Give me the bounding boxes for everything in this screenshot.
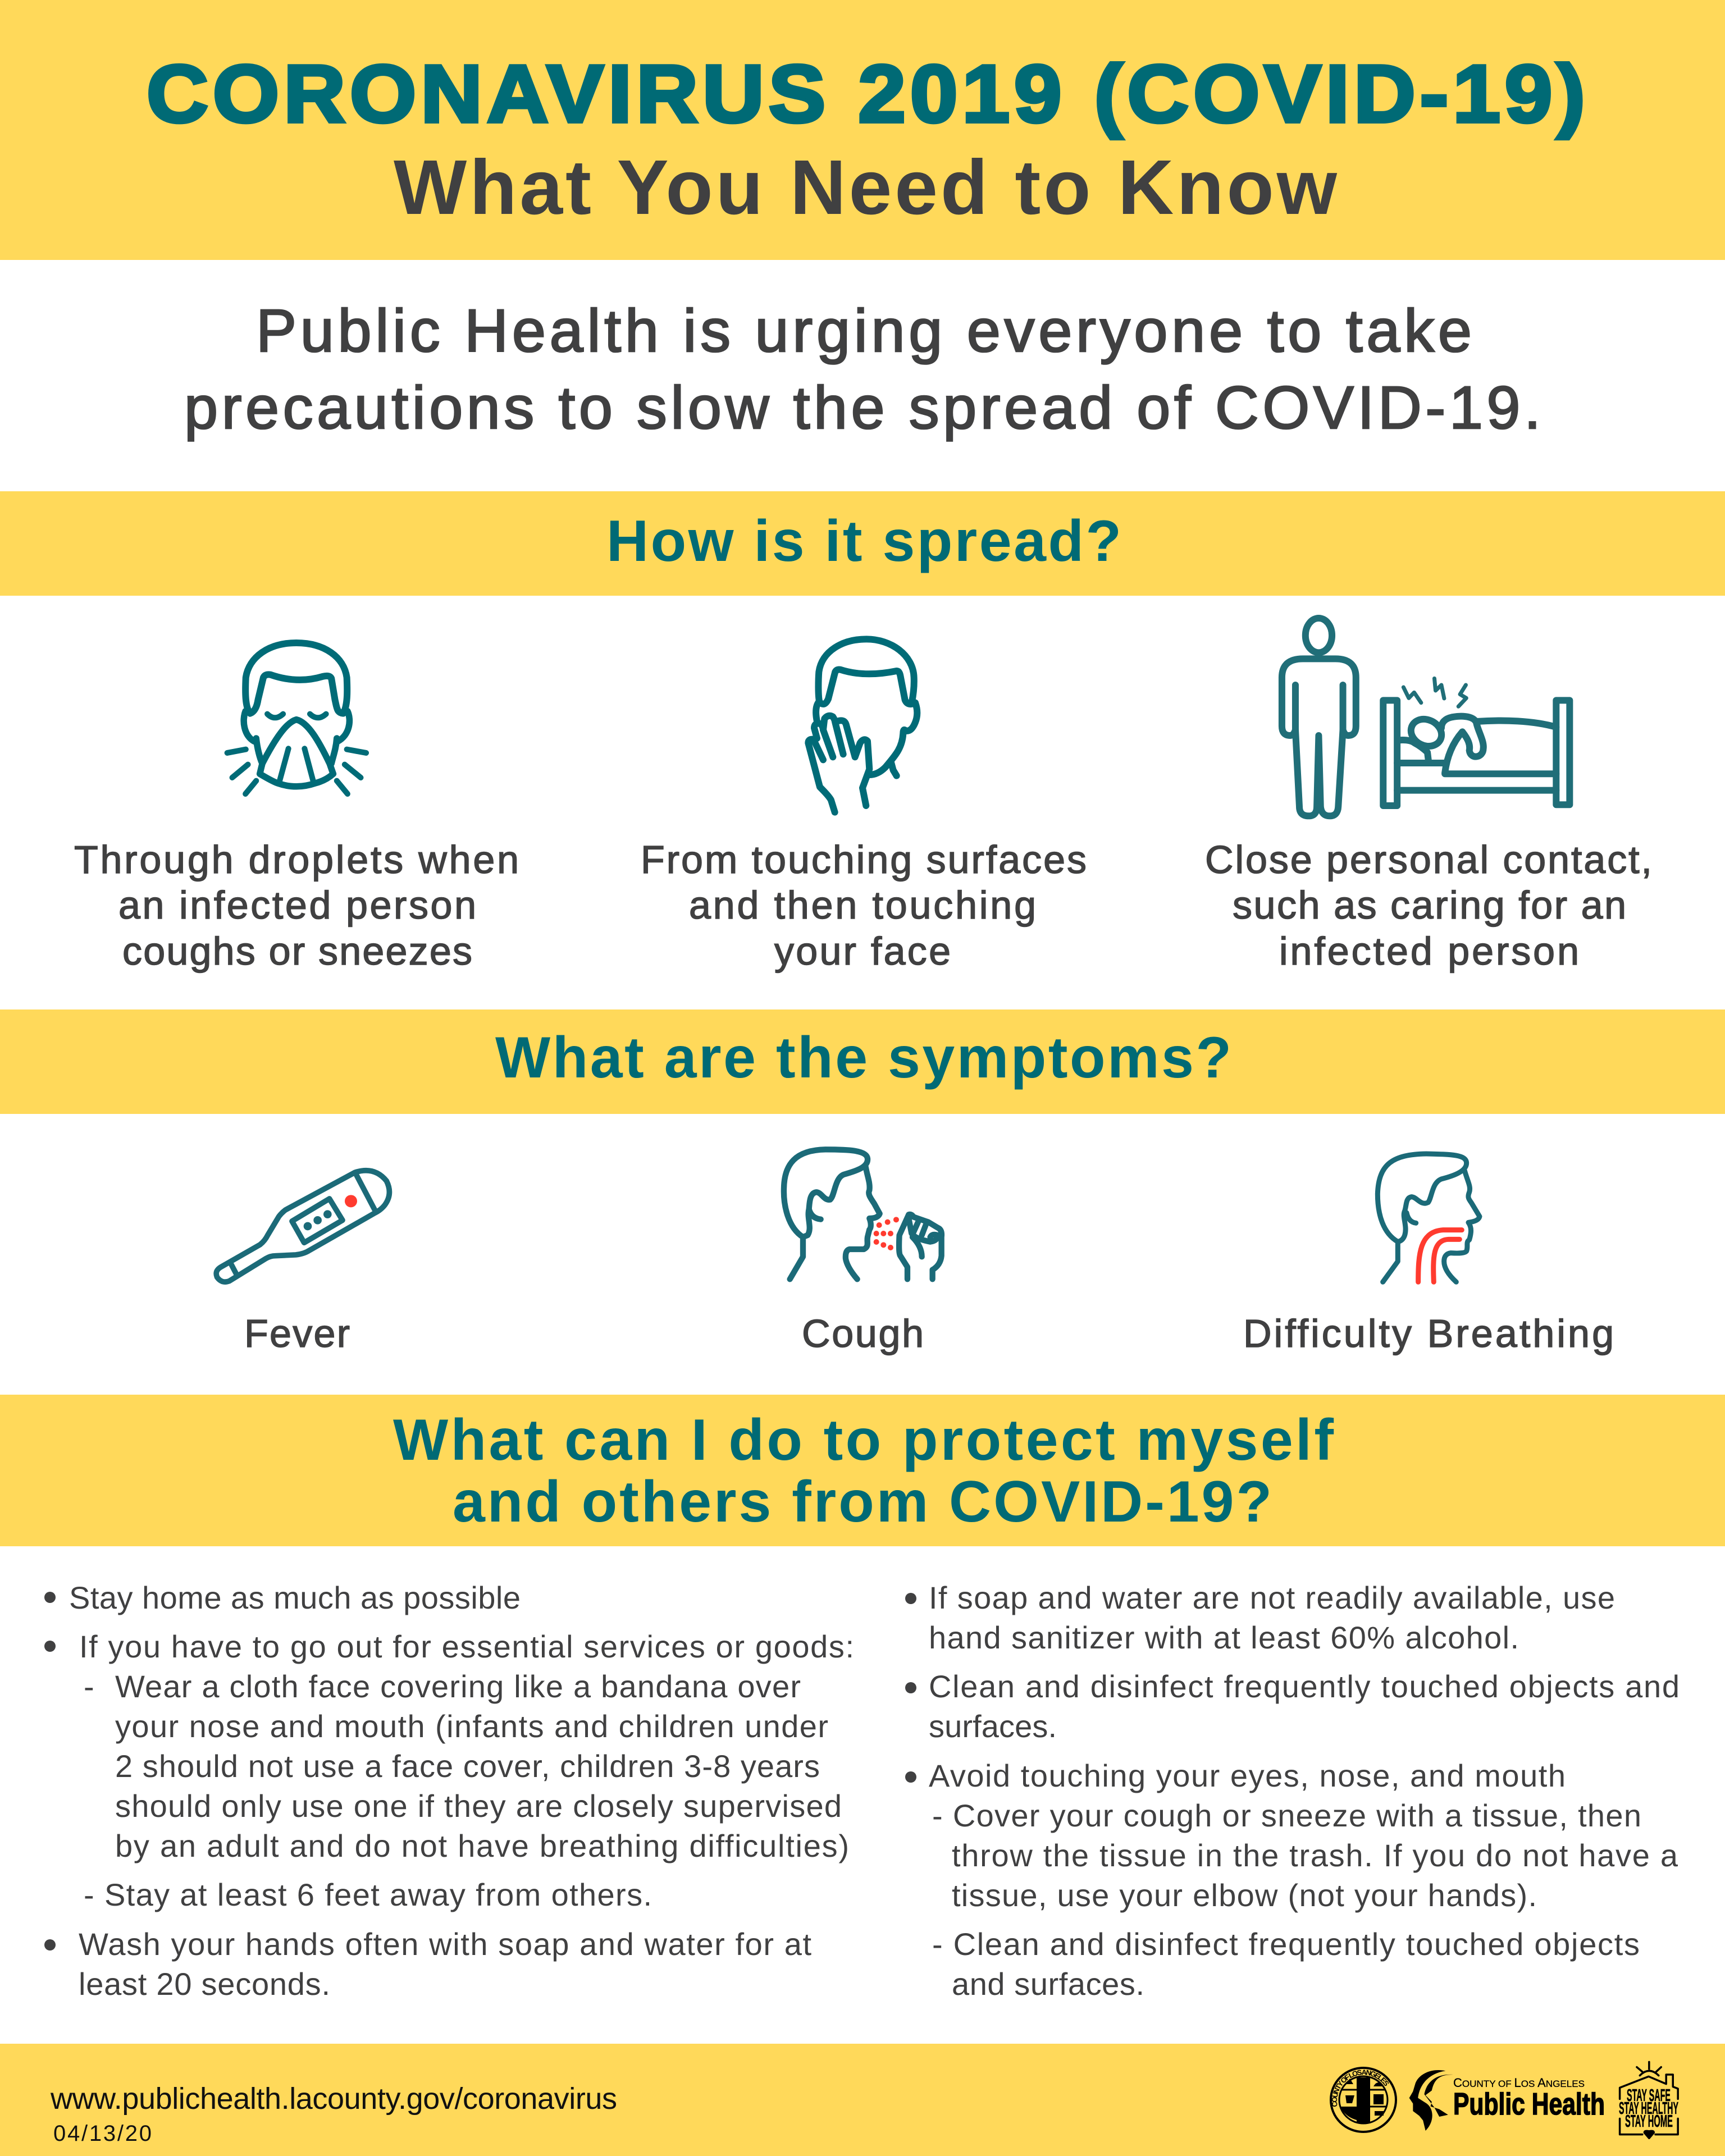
label: cough: Cough bbox=[802, 1312, 924, 1355]
panel: title banner bbox=[0, 0, 1725, 260]
text: droplets caption: Through droplets when bbox=[74, 838, 519, 881]
list: right column: Clean and disinfect frequently touched objects and bbox=[929, 1669, 1680, 1704]
logo: public health: Public Health bbox=[1453, 2086, 1605, 2121]
heading: protect bbox=[393, 1408, 1334, 1534]
label: fever: Fever bbox=[244, 1312, 350, 1355]
logo: public health bbox=[1409, 2070, 1605, 2131]
text: close contact caption: such as caring for an bbox=[1233, 883, 1626, 927]
icon: coughing person bbox=[784, 1149, 942, 1279]
text: close contact caption: infected person bbox=[1279, 929, 1579, 973]
list: right column: tissue, use your elbow (not your hands). bbox=[952, 1878, 1537, 1913]
list: left column: least 20 seconds. bbox=[79, 1966, 330, 2002]
icon: thermometer bbox=[216, 1171, 389, 1282]
list: right column: and surfaces. bbox=[952, 1966, 1144, 2002]
logo: stay safe house: STAY SAFE bbox=[1627, 2085, 1671, 2105]
list: left column bbox=[44, 1580, 854, 2002]
list: left column: Stay home as much as possible bbox=[69, 1580, 521, 1615]
text: surfaces caption: your face bbox=[774, 929, 951, 973]
list: left column: - bbox=[84, 1669, 94, 1704]
date: 04/13/20 bbox=[53, 2121, 152, 2146]
icon: sneezing face with mask bbox=[227, 643, 366, 794]
list: left column: Wear a cloth face covering like a bandana over bbox=[115, 1669, 801, 1704]
intro text: precautions to slow the spread of COVID-19. bbox=[184, 373, 1541, 441]
list: left column: Wash your hands often with soap and water for at bbox=[79, 1926, 811, 1962]
intro text: Public Health is urging everyone to take bbox=[256, 296, 1472, 364]
title: CORONAVIRUS 2019 (COVID-19) bbox=[147, 48, 1585, 139]
panel: protection advice bbox=[0, 1395, 1725, 2002]
list: right column: Avoid touching your eyes, nose, and mouth bbox=[929, 1758, 1566, 1793]
list: right column: - Clean and disinfect frequently touched objects bbox=[932, 1926, 1640, 1962]
intro text bbox=[184, 296, 1541, 441]
logo: stay safe house bbox=[1619, 2062, 1678, 2138]
heading: protect: What can I do to protect myself bbox=[393, 1408, 1334, 1473]
panel: how is it spread bbox=[0, 491, 1725, 973]
icon: difficulty breathing bbox=[1377, 1154, 1480, 1282]
list: left column: should only use one if they are closely supervised bbox=[115, 1788, 842, 1824]
text: surfaces caption: From touching surfaces bbox=[641, 838, 1087, 881]
icon: person beside sick patient in bed bbox=[1282, 618, 1569, 816]
text: surfaces caption bbox=[641, 838, 1087, 973]
heading: how is it spread: How is it spread? bbox=[606, 509, 1121, 574]
label: difficulty breathing: Difficulty Breathing bbox=[1243, 1312, 1614, 1355]
text: droplets caption: an infected person bbox=[118, 883, 476, 927]
list: right column: - Cover your cough or sneeze with a tissue, then bbox=[932, 1798, 1641, 1833]
list: left column: your nose and mouth (infants and children under bbox=[115, 1709, 828, 1744]
list: left column: - Stay at least 6 feet away from others. bbox=[84, 1877, 652, 1912]
list: right column: hand sanitizer with at least 60% alcohol. bbox=[929, 1620, 1519, 1655]
list: right column: throw the tissue in the trash. If you do not have a bbox=[952, 1838, 1678, 1873]
logo: county seal: COUNTY OF LOS ANGELES bbox=[1332, 2070, 1389, 2107]
logo: county seal bbox=[1330, 2067, 1397, 2133]
list: right column bbox=[905, 1580, 1680, 2002]
text: droplets caption: coughs or sneezes bbox=[122, 929, 472, 973]
panel: footer bbox=[0, 2044, 1725, 2156]
list: left column: If you have to go out for essential services or goods: bbox=[79, 1629, 854, 1664]
list: right column: surfaces. bbox=[929, 1709, 1057, 1744]
text: droplets caption bbox=[74, 838, 519, 973]
panel: symptoms bbox=[0, 1010, 1725, 1355]
heading: symptoms: What are the symptoms? bbox=[495, 1025, 1231, 1090]
list: left column: 2 should not use a face cover, children 3-8 years bbox=[115, 1748, 820, 1784]
list: left column: by an adult and do not have breathing difficulties) bbox=[115, 1828, 849, 1863]
logo: public health: COUNTY OF LOS ANGELES bbox=[1453, 2076, 1585, 2090]
text: surfaces caption: and then touching bbox=[689, 883, 1036, 927]
text: close contact caption bbox=[1205, 838, 1652, 973]
logo: stay safe house: STAY HOME bbox=[1625, 2111, 1673, 2131]
list: right column: If soap and water are not readily available, use bbox=[929, 1580, 1615, 1615]
text: close contact caption: Close personal contact, bbox=[1205, 838, 1652, 881]
website url: www.publichealth.lacounty.gov/coronavirus bbox=[50, 2082, 617, 2116]
icon: hand touching face bbox=[808, 639, 917, 812]
subtitle: What You Need to Know bbox=[394, 144, 1338, 231]
heading: protect: and others from COVID-19? bbox=[453, 1469, 1272, 1534]
